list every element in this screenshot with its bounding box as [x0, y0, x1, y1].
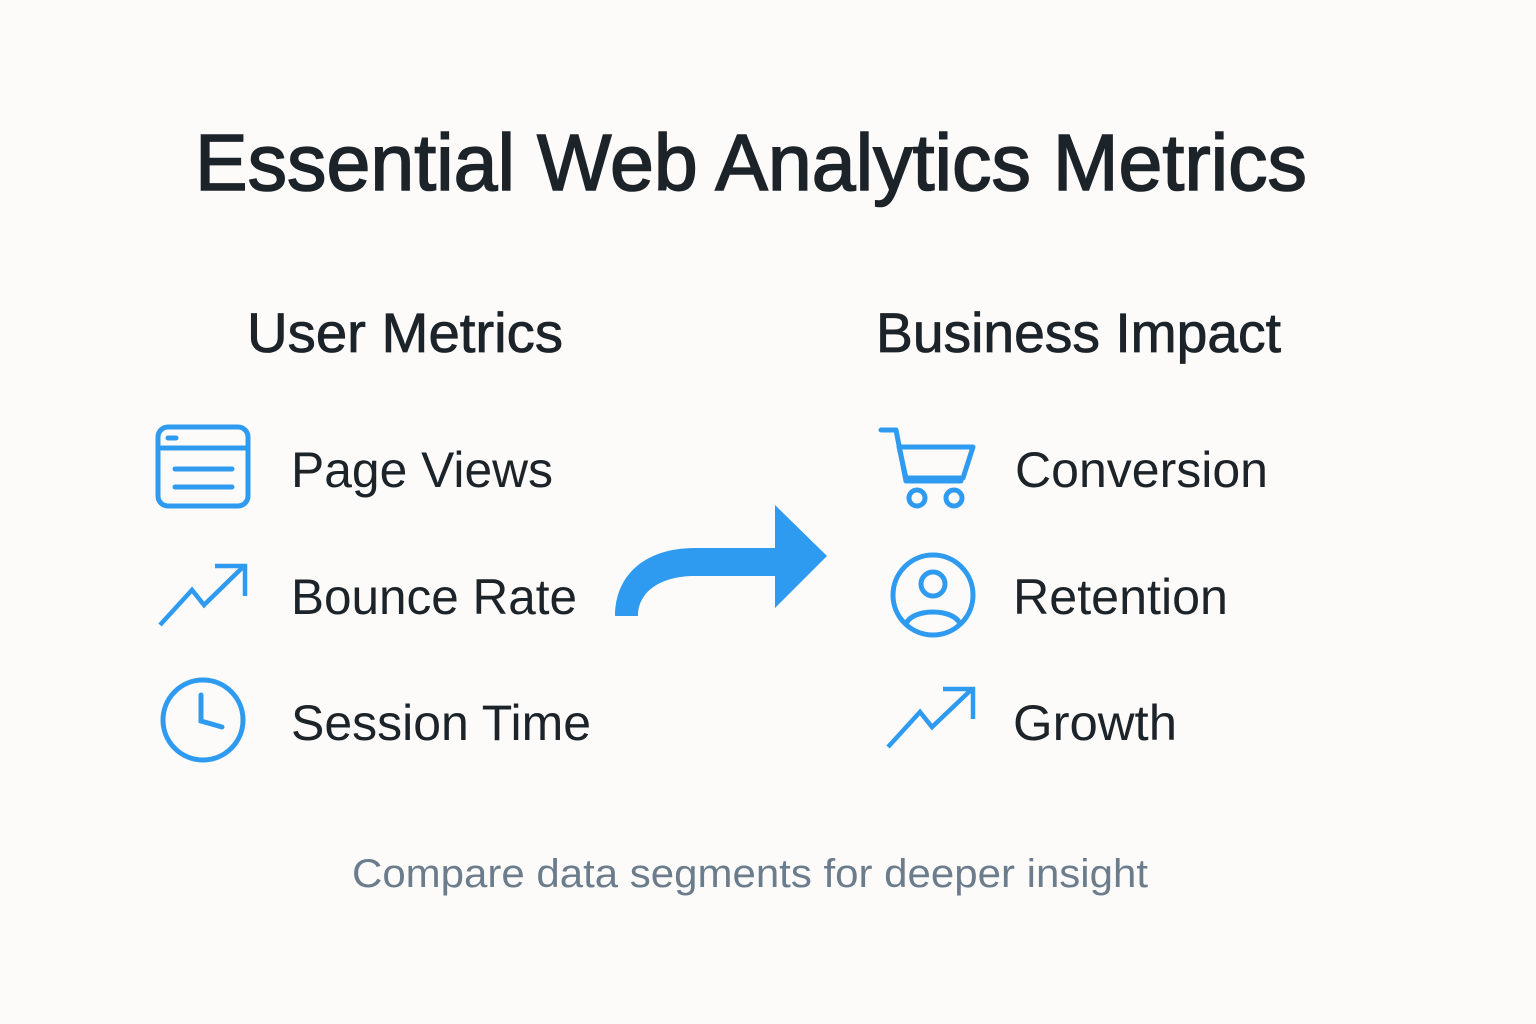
text: page views: Page Views: [291, 442, 553, 498]
heading: user metrics: User Metrics: [247, 301, 563, 364]
heading: business impact: Business Impact: [876, 301, 1281, 364]
panel: user metrics list: [158, 427, 591, 760]
icon: page: [158, 427, 248, 506]
text: retention: Retention: [1013, 569, 1228, 625]
icon: growth: [888, 689, 973, 747]
panel: business impact list: [881, 430, 1268, 751]
icon: user: [893, 555, 973, 635]
title: Essential Web Analytics Metrics: [195, 118, 1307, 207]
icon: trend: [160, 566, 245, 625]
text: conversion: Conversion: [1015, 442, 1268, 498]
text: bounce rate: Bounce Rate: [291, 569, 577, 625]
icon: clock: [163, 680, 243, 760]
text: session time: Session Time: [291, 695, 591, 751]
icon: cart: [881, 430, 973, 506]
text: growth: Growth: [1013, 695, 1177, 751]
footer caption: Compare data segments for deeper insight: [352, 852, 1148, 896]
arrow: curved right: [615, 505, 827, 616]
